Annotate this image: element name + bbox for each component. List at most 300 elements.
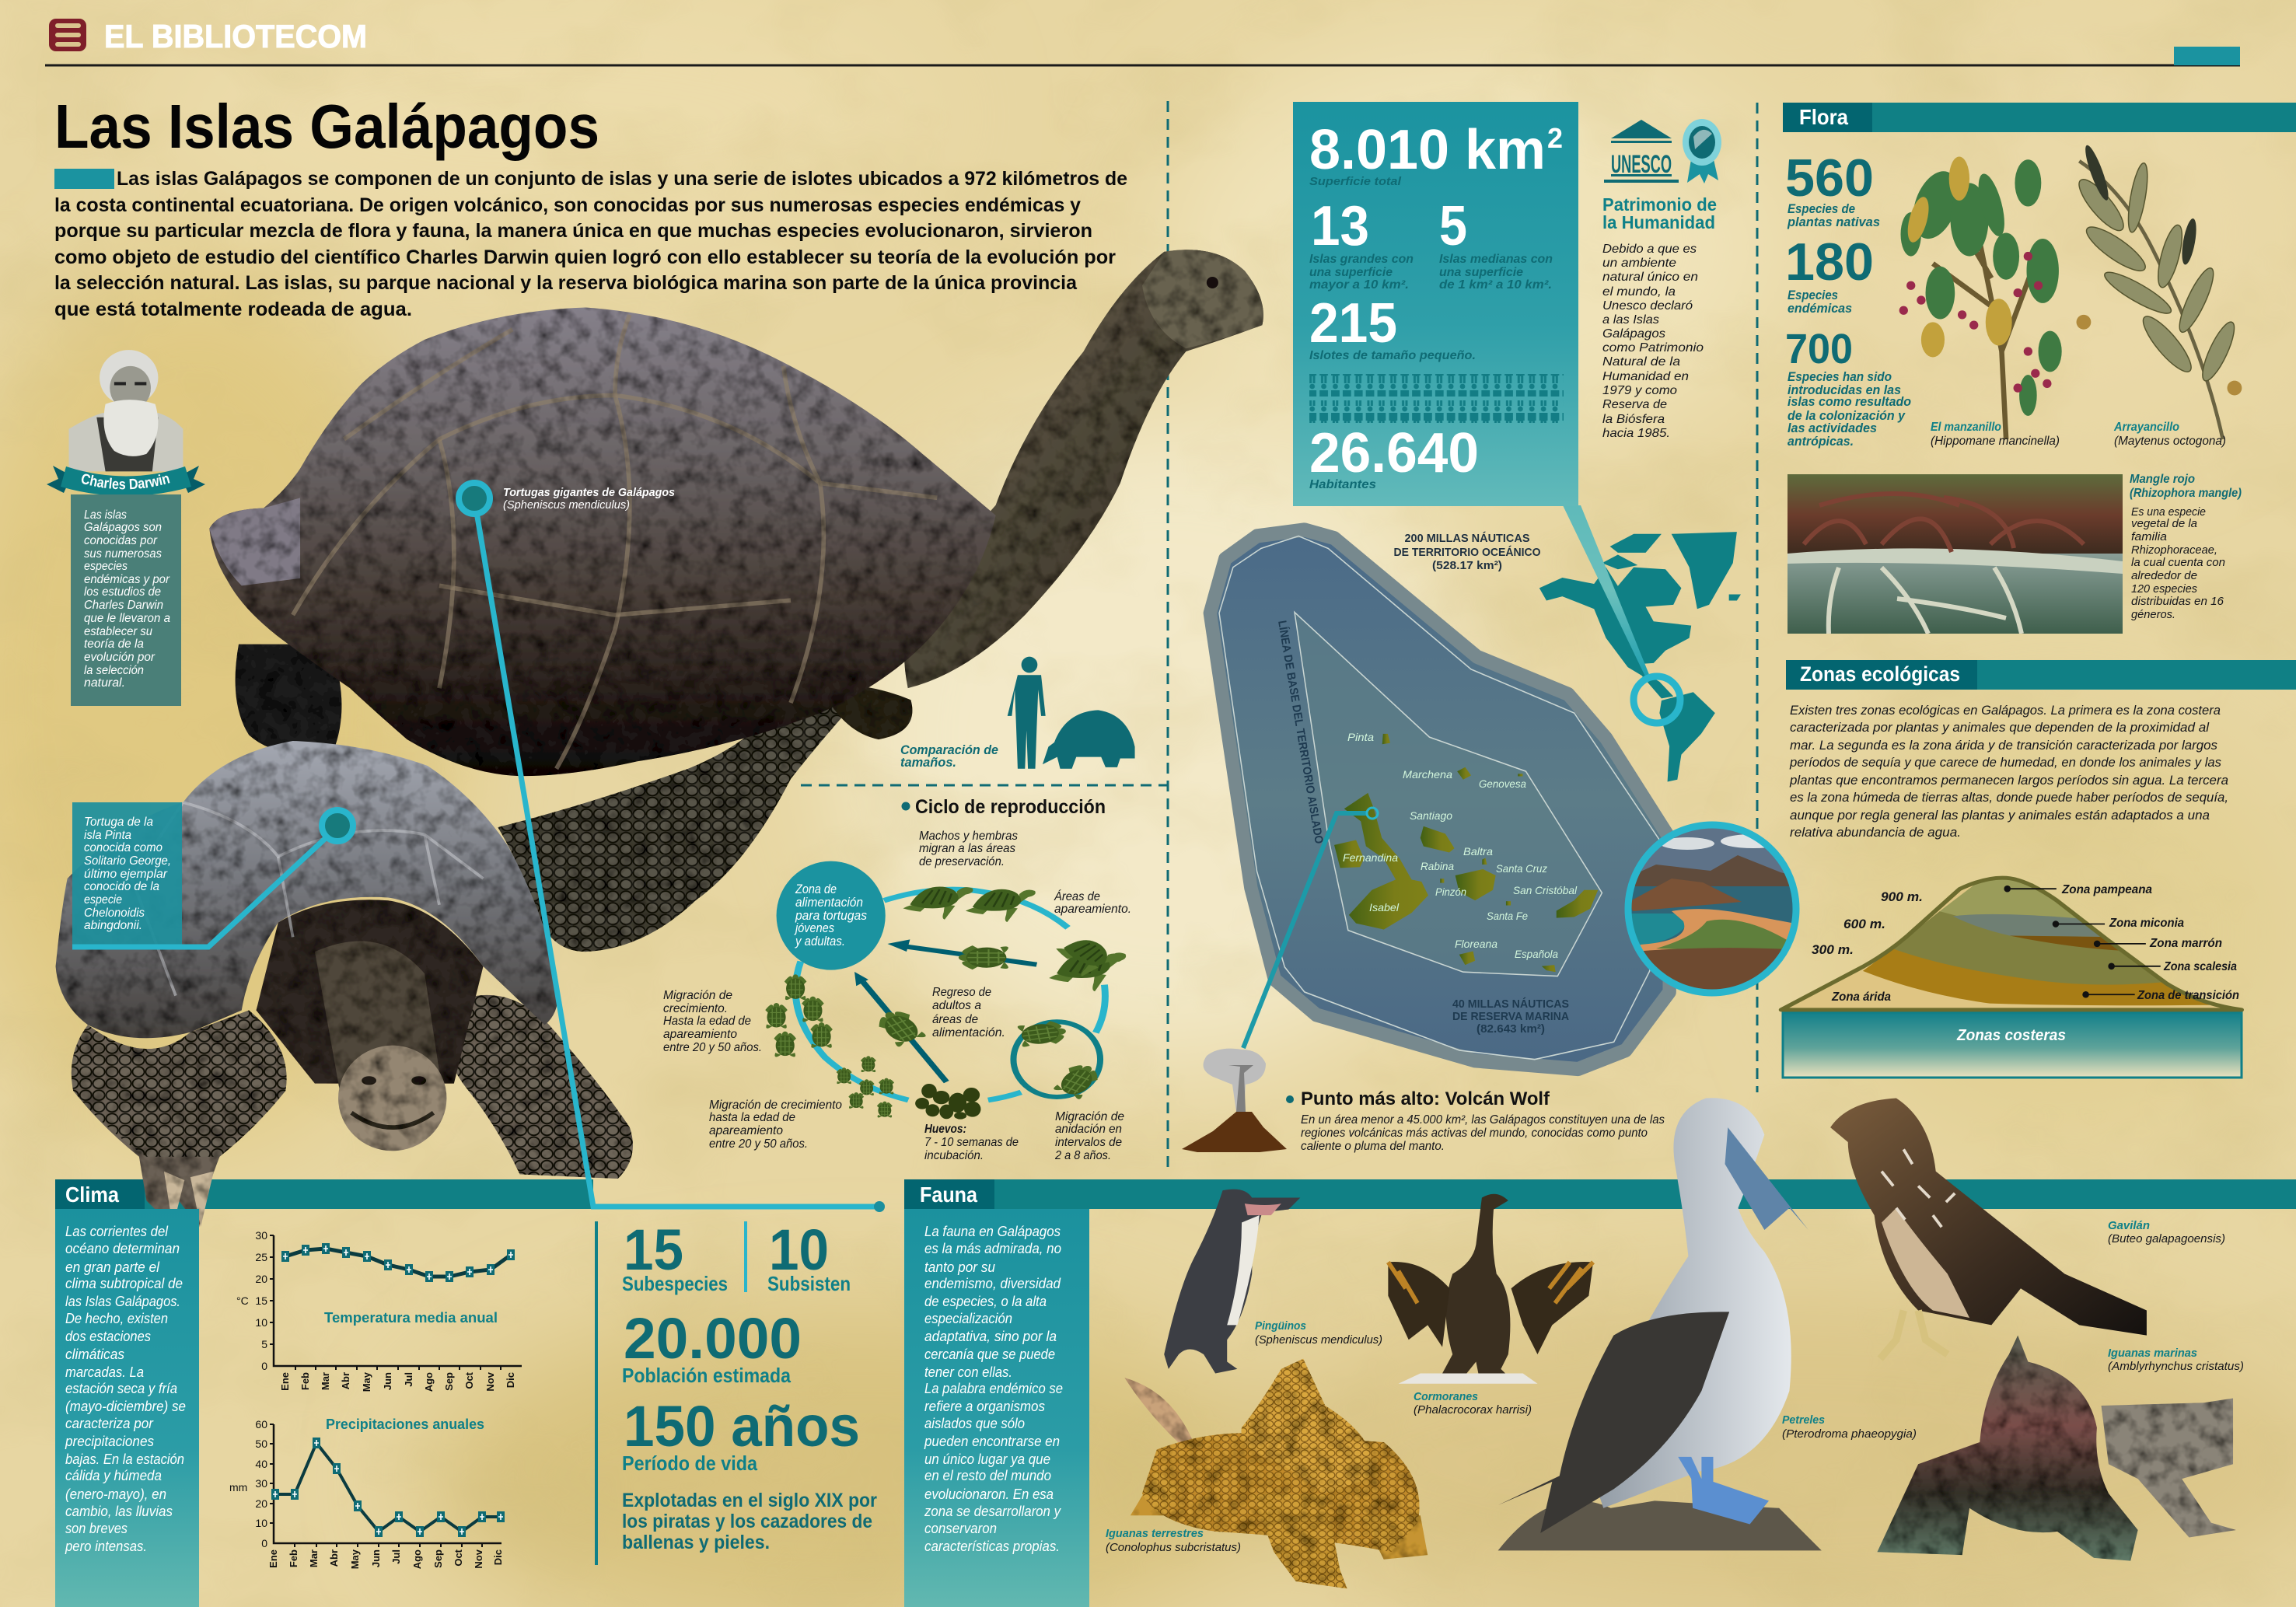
panel: Darwin note: que le llevaron a: [84, 612, 170, 625]
panel: Darwin note: la selección: [84, 664, 144, 677]
mangrove text: familia: [2131, 530, 2167, 543]
heritage heading: la Humanidad: [1602, 212, 1715, 232]
icon: UNESCO temple: [1604, 120, 1679, 183]
panel: key figures: mayor a 10 km².: [1309, 278, 1409, 292]
chart: temperature: 15: [255, 1294, 267, 1307]
cycle captions: apareamiento.: [1054, 903, 1131, 916]
photo: island landscape: [1625, 820, 1804, 999]
zone labels: Zona pampeana: [2061, 883, 2152, 896]
panel: key figures: 2: [1547, 122, 1563, 154]
flora statistics: 560: [1785, 148, 1874, 208]
panel: George note: conocida como: [84, 841, 163, 854]
panel: Darwin note: los estudios de: [84, 585, 161, 599]
cycle captions: entre 20 y 50 años.: [663, 1041, 762, 1054]
cycle captions: anidación en: [1055, 1123, 1122, 1136]
panel: Darwin note: Charles Darwin: [84, 599, 163, 612]
cycle captions: alimentación.: [932, 1026, 1005, 1039]
flora statistics: endémicas: [1788, 302, 1852, 316]
panel: key figures: Islas grandes con: [1309, 253, 1414, 266]
zones paragraph: relativa abundancia de agua.: [1790, 826, 1961, 840]
panel: Fauna text: cercanía que se puede: [924, 1347, 1055, 1362]
panel: George note: isla Pinta: [84, 829, 131, 842]
tortoise statistics: 15: [624, 1217, 683, 1282]
panel: key figures: una superficie: [1309, 266, 1393, 279]
island names: Marchena: [1403, 768, 1452, 781]
panel: Darwin note: Las islas: [84, 508, 127, 522]
zones paragraph: plantas que encontramos permanecen largos períodos sin agua. La tercera: [1789, 774, 2228, 788]
comparison label: Comparación de: [900, 742, 998, 757]
chart: rainfall: Ene: [267, 1549, 279, 1568]
heritage text: el mundo, la: [1602, 285, 1676, 299]
callout: wedge from info box: [1563, 505, 1650, 676]
panel: George note: Tortuga de la: [84, 816, 153, 829]
flora statistics: [1785, 148, 1911, 449]
animal captions: Iguanas terrestres: [1106, 1527, 1204, 1540]
panel: Flora: [1783, 103, 2296, 634]
cycle captions: Regreso de: [932, 986, 991, 999]
illustration: manzanillo plant: [1899, 157, 2062, 439]
panel: Fauna text: refiere a organismos: [924, 1399, 1045, 1414]
cycle captions: áreas de: [932, 1013, 978, 1026]
mangrove text: vegetal de la: [2131, 517, 2197, 530]
section bar: Fauna: [904, 1179, 2296, 1209]
chart: temperature: Dic: [505, 1372, 516, 1388]
chart: rainfall: Sep: [432, 1549, 444, 1568]
panel: Fauna text: evolucionaron. En esa: [924, 1486, 1054, 1502]
panel: Fauna text: aislados que sólo: [924, 1416, 1025, 1431]
cycle captions: 2 a 8 años.: [1054, 1149, 1111, 1162]
panel: George note: abingdonii.: [84, 919, 142, 932]
tortoise statistics: ballenas y pieles.: [622, 1532, 770, 1553]
panel: Clima text: clima subtropical de: [65, 1276, 183, 1291]
islands: [1334, 734, 1598, 972]
animal captions: Pingüinos: [1255, 1319, 1306, 1333]
panel: Darwin note: Galápagos son: [84, 521, 162, 534]
panel: George note: especie: [84, 893, 122, 907]
section bar: Clima: [55, 1179, 593, 1209]
plant captions: El manzanillo: [1931, 421, 2001, 434]
chart: rainfall: Precipitaciones anuales: [326, 1417, 484, 1432]
chart: rainfall: mm: [229, 1481, 247, 1493]
zones paragraph: aunque por regla general las plantas y animales están adaptados a una: [1790, 809, 2210, 823]
animal captions: Cormoranes: [1414, 1390, 1478, 1403]
zones bar: [1786, 660, 2296, 690]
dashed dividers: [801, 101, 1757, 1174]
panel: Fauna text: de especies, o la alta: [924, 1294, 1047, 1309]
cycle captions: Migración de crecimiento: [709, 1099, 842, 1112]
tortoise statistics: [596, 1217, 877, 1565]
panel: Fauna text: La fauna en Galápagos: [924, 1224, 1061, 1239]
panel: George note: Chelonoidis: [84, 907, 145, 920]
panel: Fauna text: especialización: [924, 1311, 1012, 1326]
plant captions: [1931, 421, 2226, 448]
UNESCO heritage: [1602, 119, 1721, 440]
panel: Fauna text: en el resto del mundo: [924, 1468, 1051, 1483]
chart: temperature: 30: [255, 1229, 267, 1242]
flora statistics: 700: [1785, 326, 1853, 372]
map: Galápagos marine reserve: 40 MILLAS NÁUTICAS: [1452, 997, 1569, 1011]
callout: pointer line to Clima stats: [459, 483, 885, 1212]
feeding zone text: para tortugas: [795, 909, 867, 923]
island names: Isabel: [1369, 901, 1400, 914]
flora statistics: de la colonización y: [1788, 409, 1906, 423]
island names: Fernandina: [1343, 851, 1398, 864]
icon: award rosette: [1683, 119, 1721, 183]
feeding zone text: Zona de: [795, 882, 837, 896]
panel: Clima text: océano determinan: [65, 1241, 180, 1256]
map territory labels: [1393, 532, 1541, 572]
size comparison: [900, 657, 1135, 770]
panel: George note: Solitario George,: [84, 854, 171, 868]
panel: key figures: 8.010 km: [1309, 119, 1546, 181]
island names: Genovesa: [1479, 777, 1526, 790]
cycle captions: de preservación.: [919, 855, 1005, 868]
panel: George note: último ejemplar: [84, 868, 168, 881]
chart: rainfall: Abr: [328, 1549, 340, 1567]
heritage text: [1602, 243, 1704, 440]
flora statistics: Especies han sido: [1788, 370, 1892, 384]
cycle captions: Hasta la edad de: [663, 1015, 751, 1028]
illustration: George the Pinta tortoise: [56, 741, 633, 1227]
cycle captions: adultos a: [932, 999, 981, 1012]
icon: human and tortoise silhouettes: [1008, 657, 1135, 769]
cycle heading: Ciclo de reproducción: [915, 796, 1106, 818]
heritage text: 1979 y como: [1602, 384, 1677, 397]
panel: Clima text: marcadas. La: [65, 1364, 144, 1380]
tortoise statistics: 10: [769, 1217, 829, 1282]
panel: Clima text: Las corrientes del: [65, 1224, 169, 1239]
chart: temperature: Temperatura media anual: [324, 1310, 498, 1326]
map territory labels: 200 MILLAS NÁUTICAS: [1404, 532, 1530, 545]
animal captions: (Phalacrocorax harrisi): [1414, 1403, 1532, 1417]
panel: key figures: 13: [1311, 195, 1369, 257]
tortoise caption: (Spheniscus mendiculus): [503, 498, 630, 512]
panel: Clima text: precipitaciones: [65, 1434, 154, 1449]
cycle captions: crecimiento.: [663, 1002, 728, 1015]
animal captions: (Conolophus subcristatus): [1106, 1541, 1241, 1554]
panel: Clima text: cambio, las lluvias: [65, 1504, 173, 1519]
island names: [1343, 731, 1578, 960]
chart: rainfall: Oct: [453, 1549, 464, 1567]
intro paragraph: la costa continental ecuatoriana. De origen volcánico, son conocidas por sus numerosas especies endémicas y: [54, 194, 1081, 216]
panel: George note: conocido de la: [84, 880, 159, 893]
heritage text: la Biósfera: [1602, 413, 1665, 426]
panel: key figures: 5: [1439, 195, 1467, 257]
island names: Rabina: [1421, 860, 1454, 872]
header tab: [2174, 47, 2240, 65]
site name: EL BIBLIOTECOM: [104, 18, 367, 54]
sea box: [1783, 1012, 2242, 1078]
altitude labels: 600 m.: [1843, 917, 1885, 931]
panel: key figures: de 1 km² a 10 km².: [1439, 278, 1552, 292]
chart: rainfall: 10: [255, 1517, 267, 1529]
mangrove text: 120 especies: [2131, 582, 2197, 596]
panel: key figures: 215: [1309, 292, 1397, 355]
Volcán Wolf: [1182, 1049, 1665, 1153]
illustration: flightless cormorant: [1388, 1194, 1593, 1384]
panel: key figures: 26.640: [1309, 422, 1479, 484]
animal captions: Petreles: [1782, 1413, 1825, 1427]
heritage text: Reserva de: [1602, 398, 1667, 411]
chart: temperature: 5: [261, 1338, 267, 1350]
chart: temperature: Ene: [279, 1372, 291, 1391]
cycle diagram: [765, 861, 1126, 1120]
illustration: arrayancillo branch: [2073, 143, 2242, 439]
panel: Fauna text: tener con ellas.: [924, 1364, 1012, 1380]
intro paragraph: la selección natural. Las islas, su parque nacional y la reserva biológica marina son parte de la única provincia: [54, 272, 1078, 294]
cycle captions: Migración de: [1055, 1110, 1124, 1123]
panel: Clima text: [55, 1209, 199, 1607]
mangrove text: Es una especie: [2131, 505, 2206, 519]
Darwin ribbon: Charles Darwin: [81, 474, 169, 490]
icon: population rows: [1309, 374, 1564, 423]
chart: rainfall: 50: [255, 1438, 267, 1450]
panel: Clima text: las Islas Galápagos.: [65, 1294, 180, 1309]
tortoise caption: [503, 486, 675, 512]
panel: Fauna text: tanto por su: [924, 1259, 995, 1275]
chart: temperature: 0: [261, 1360, 267, 1372]
flora statistics: Especies de: [1788, 202, 1855, 216]
chart: temperature: Sep: [443, 1372, 455, 1391]
cycle captions: hasta la edad de: [709, 1111, 795, 1124]
chart: temperature: Jun: [382, 1372, 393, 1390]
mangrove text: Rhizophoraceae,: [2131, 543, 2217, 557]
chart: rainfall: Ago: [411, 1549, 423, 1569]
cycle captions: Machos y hembras: [919, 830, 1018, 843]
panel: Clima text: dos estaciones: [65, 1329, 151, 1344]
panel: Darwin note: conocidas por: [84, 534, 158, 547]
panel: key figures: [1293, 102, 1578, 506]
cycle captions: Huevos:: [924, 1123, 966, 1136]
island names: Santiago: [1410, 809, 1452, 822]
panel: Darwin note: endémicas y por: [84, 573, 170, 586]
mountain cross-section: [1781, 878, 2242, 1010]
zone labels: Zona miconia: [2109, 917, 2184, 930]
flora statistics: Especies: [1788, 288, 1838, 302]
cycle captions: Áreas de: [1054, 889, 1100, 903]
map: Galápagos marine reserve: LÍNEA DE BASE DEL TERRITORIO AISLADO: [1275, 620, 1326, 845]
flora statistics: plantas nativas: [1787, 215, 1880, 229]
comparison label: [900, 742, 998, 770]
intro paragraph: [54, 168, 1127, 320]
zones paragraph: períodos de sequía y que carece de humedad, en donde los animales y las: [1789, 756, 2221, 770]
panel: Clima text: (enero-mayo), en: [65, 1486, 166, 1502]
heritage text: a las Islas: [1602, 313, 1659, 327]
chart: rainfall: Jul: [390, 1549, 402, 1564]
heritage text: Debido a que es: [1602, 243, 1697, 256]
island names: Pinzón: [1435, 886, 1466, 898]
panel: Darwin note: evolución por: [84, 651, 156, 664]
illustration: penguin: [1164, 1190, 1300, 1374]
heritage text: Natural de la: [1602, 355, 1680, 369]
map: Galápagos marine reserve: (82.643 km²): [1476, 1022, 1545, 1036]
chart: rainfall: Dic: [492, 1549, 504, 1565]
intro paragraph: porque su particular mezcla de flora y fauna, la manera única en que muchas especies evolucionaron, sirvieron: [54, 220, 1092, 242]
Darwin ribbon: [47, 466, 205, 494]
cycle captions: apareamiento: [709, 1124, 783, 1137]
animal captions: [1106, 1219, 2244, 1554]
intro paragraph: como objeto de estudio del científico Charles Darwin quien logró con ello establecer su teoría de la evolución por: [54, 246, 1116, 268]
logo header: [49, 18, 367, 54]
panel: Darwin note: sus numerosas: [84, 547, 162, 561]
mangrove text: alrededor de: [2131, 569, 2197, 582]
volcano text: caliente o pluma del manto.: [1301, 1140, 1445, 1153]
cycle captions: [663, 830, 1131, 1162]
altitude labels: [1812, 889, 1923, 957]
chart: rainfall: Jun: [370, 1549, 382, 1567]
tortoise statistics: 20.000: [624, 1306, 802, 1371]
cycle captions: Migración de: [663, 989, 732, 1002]
tortoise statistics: Subsisten: [767, 1272, 851, 1295]
icon: volcano: [1182, 1049, 1287, 1152]
reproduction cycle: [663, 796, 1131, 1162]
altitude labels: 900 m.: [1881, 889, 1923, 904]
panel: Clima text: bajas. En la estación: [65, 1452, 184, 1467]
feeding zone text: y adultas.: [795, 935, 845, 948]
mangrove text: Mangle rojo: [2130, 473, 2195, 486]
chart: rainfall: [229, 1417, 505, 1569]
chart: rainfall: Feb: [288, 1549, 299, 1567]
island names: Santa Cruz: [1496, 862, 1547, 875]
animal captions: (Pterodroma phaeopygia): [1782, 1427, 1917, 1441]
illustration: giant tortoise: [209, 250, 1263, 952]
heritage text: hacia 1985.: [1602, 427, 1670, 440]
illustration: Galápagos hawk: [1830, 1098, 2147, 1359]
panel: Clima text: De hecho, existen: [65, 1311, 168, 1326]
map territory labels: (528.17 km²): [1432, 559, 1502, 572]
feeding zone text: jóvenes: [794, 921, 834, 935]
animal captions: (Spheniscus mendiculus): [1255, 1333, 1382, 1347]
panel: Darwin note: teoría de la: [84, 638, 144, 651]
chart: temperature: 10: [255, 1316, 267, 1329]
mangrove text: distribuidas en 16: [2131, 595, 2224, 608]
volcano text: En un área menor a 45.000 km², las Galápagos constituyen una de las: [1301, 1113, 1665, 1127]
panel: Fauna text: zona se desarrollaron y: [924, 1504, 1061, 1519]
plant captions: (Maytenus octogona): [2114, 435, 2226, 448]
flora statistics: antrópicas.: [1788, 435, 1854, 449]
chart: temperature: °C: [236, 1294, 249, 1307]
zone labels: [1831, 883, 2239, 1004]
zone labels: Zona scalesia: [2163, 960, 2237, 973]
chart: rainfall: 20: [255, 1497, 267, 1510]
panel: key figures: Islotes de tamaño pequeño.: [1309, 349, 1476, 362]
comparison label: tamaños.: [900, 755, 956, 770]
chart: temperature: 20: [255, 1273, 267, 1285]
flora statistics: islas como resultado: [1788, 395, 1911, 409]
chart: temperature: Feb: [299, 1372, 311, 1390]
chart: rainfall: Nov: [473, 1549, 484, 1569]
zones paragraph: caracterizada por plantas y animales que dependen de la proximidad al: [1790, 721, 2210, 735]
tortoise statistics: Período de vida: [622, 1452, 757, 1475]
tortoise statistics: los piratas y los cazadores de: [622, 1511, 872, 1532]
illustration: blue-footed booby: [1498, 1098, 1822, 1550]
animal captions: Gavilán: [2108, 1219, 2150, 1232]
zones bar: Zonas ecológicas: [1800, 662, 1960, 686]
island names: San Cristóbal: [1513, 884, 1578, 896]
map: Galápagos marine reserve: [1210, 529, 1669, 1069]
panel: Fauna text: es la más admirada, no: [924, 1241, 1061, 1256]
cycle captions: entre 20 y 50 años.: [709, 1137, 808, 1151]
heritage heading: [1602, 194, 1717, 232]
chart: temperature: [236, 1229, 522, 1392]
panel: Clima text: pero intensas.: [65, 1539, 147, 1554]
section bar: Fauna: Fauna: [920, 1183, 977, 1207]
animal captions: (Amblyrhynchus cristatus): [2108, 1360, 2244, 1373]
zones paragraph: [1789, 704, 2228, 840]
chart: rainfall: 30: [255, 1477, 267, 1490]
map: Galápagos marine reserve: DE RESERVA MARINA: [1452, 1010, 1569, 1023]
panel: Clima text: son breves: [65, 1521, 128, 1536]
chart: rainfall: 60: [255, 1418, 267, 1431]
volcano text: [1301, 1113, 1665, 1153]
panel: Clima text: cálida y húmeda: [65, 1468, 162, 1483]
mangrove text: la cual cuenta con: [2131, 556, 2225, 569]
heritage text: como Patrimonio: [1602, 341, 1704, 355]
island names: Santa Fe: [1487, 910, 1528, 922]
feeding zone text: alimentación: [795, 896, 863, 910]
panel: Fauna text: [904, 1209, 1089, 1607]
tortoise statistics: Subespecies: [622, 1272, 728, 1295]
zone labels: Zona árida: [1831, 990, 1891, 1004]
zones paragraph: es la zona húmeda de tierras altas, donde puede haber períodos de sequía,: [1790, 791, 2228, 805]
chart: temperature: Nov: [484, 1371, 496, 1392]
Flora bar: [1783, 103, 2296, 132]
panel: key figures: una superficie: [1439, 266, 1523, 279]
panel: Fauna text: adaptativa, sino por la: [924, 1329, 1057, 1344]
cycle captions: intervalos de: [1055, 1136, 1122, 1149]
title: Las Islas Galápagos: [54, 92, 599, 161]
panel: Darwin note: natural.: [84, 676, 125, 690]
cycle captions: migran a las áreas: [919, 842, 1015, 855]
panel: Fauna text: pueden encontrarse en: [924, 1434, 1060, 1449]
chart: temperature: 25: [255, 1251, 267, 1263]
panel: key figures: Habitantes: [1309, 478, 1376, 491]
island names: Española: [1515, 948, 1558, 960]
mangrove text: (Rhizophora mangle): [2130, 487, 2242, 500]
panel: Clima text: (mayo-diciembre) se: [65, 1399, 186, 1414]
flora statistics: 180: [1785, 232, 1874, 292]
panel: key figures: Superficie total: [1309, 175, 1402, 188]
panel: Darwin note: especies: [84, 560, 128, 573]
panel: Fauna text: características propias.: [924, 1539, 1060, 1554]
plant captions: (Hippomane mancinella): [1931, 435, 2060, 448]
volcano heading: Punto más alto: Volcán Wolf: [1301, 1088, 1550, 1109]
icon: UNESCO temple: UNESCO: [1611, 150, 1672, 178]
cycle captions: 7 - 10 semanas de: [924, 1136, 1019, 1149]
island names: Pinta: [1347, 731, 1374, 743]
tortoise statistics: Población estimada: [622, 1364, 791, 1387]
callout: line to Volcán Wolf: [1243, 808, 1378, 1048]
panel: George note: [72, 802, 353, 948]
panel: Fauna text: La palabra endémico se: [924, 1381, 1063, 1396]
panel: Fauna text: conservaron: [924, 1521, 997, 1536]
illustration: marine iguana: [1877, 1336, 2236, 1561]
volcano text: regiones volcánicas más activas del mundo, conocidas como punto: [1301, 1127, 1648, 1140]
chart: rainfall: Mar: [308, 1549, 320, 1567]
mangrove text: [2130, 473, 2242, 621]
section bar: Clima: Clima: [65, 1183, 119, 1207]
panel: Zonas ecológicas: [1781, 660, 2296, 1078]
panel: Darwin note: establecer su: [84, 625, 152, 638]
heritage heading: Patrimonio de: [1602, 194, 1717, 215]
feeding zone text: [794, 882, 867, 948]
heritage text: Galápagos: [1602, 327, 1665, 341]
chart: temperature: May: [361, 1371, 372, 1392]
mangrove text: géneros.: [2131, 608, 2175, 621]
altitude labels: 300 m.: [1812, 942, 1854, 957]
cycle captions: apareamiento: [663, 1028, 737, 1041]
icon: Darwin portrait: [69, 350, 183, 471]
